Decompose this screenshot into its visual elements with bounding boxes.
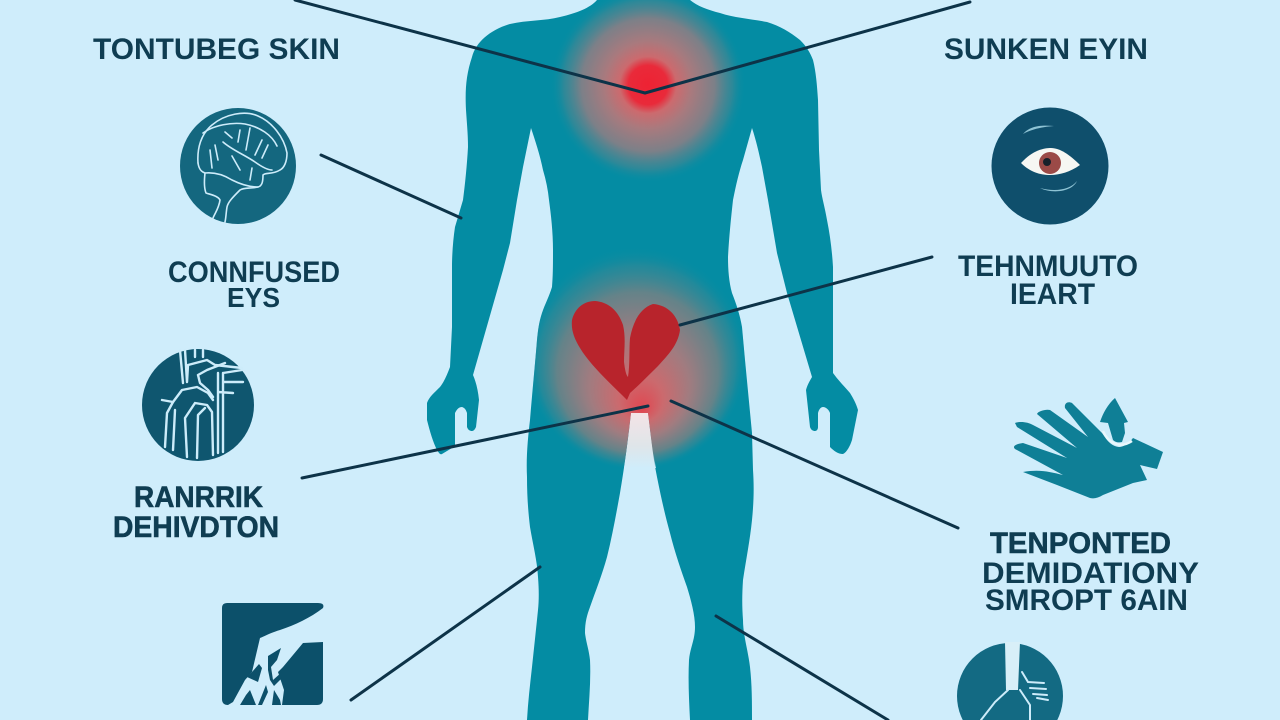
label: top right: SUNKEN EYIN [944,33,1148,66]
line: pelvis to left label [302,406,648,478]
line: heart to right label [680,257,932,325]
label: confused [168,256,340,313]
red glow: abdomen [532,256,742,468]
label: heart: IEART [1010,278,1095,311]
line: chest to top right [645,2,970,93]
label: bottom right: SMROPT 6AIN [985,584,1188,617]
icon: hand with arrow [1014,398,1163,498]
icon: eye [992,108,1108,224]
icon: brain [180,108,296,224]
line: knee to bottom right icon [716,616,888,720]
label: dehydration: RANRRIK [134,481,263,514]
line: chest to top left [295,0,645,93]
label: confused: CONNFUSED [168,256,340,289]
label: dehydration [113,481,279,544]
broken heart [572,301,680,400]
label: bottom right: TENPONTED [990,527,1171,560]
label: bottom right: DEMIDATIONY [982,557,1199,590]
label: dehydration: DEHIVDTON [113,511,279,544]
label: heart [958,250,1138,311]
label: bottom right [982,527,1199,617]
label: confused: EYS [227,282,280,313]
label: top left: TONTUBEG SKIN [93,33,340,66]
line: thigh to square icon [351,567,540,700]
icon: square hand [222,603,323,705]
human body silhouette [427,0,858,720]
leader lines [295,0,970,720]
line: arm to brain icon [321,155,461,218]
red glow: chest [550,0,746,183]
label: heart: TEHNMUUTO [958,250,1138,283]
line: pelvis to right label [671,401,958,528]
icon: bottom right circle [957,642,1063,720]
icon: joints [142,349,254,461]
